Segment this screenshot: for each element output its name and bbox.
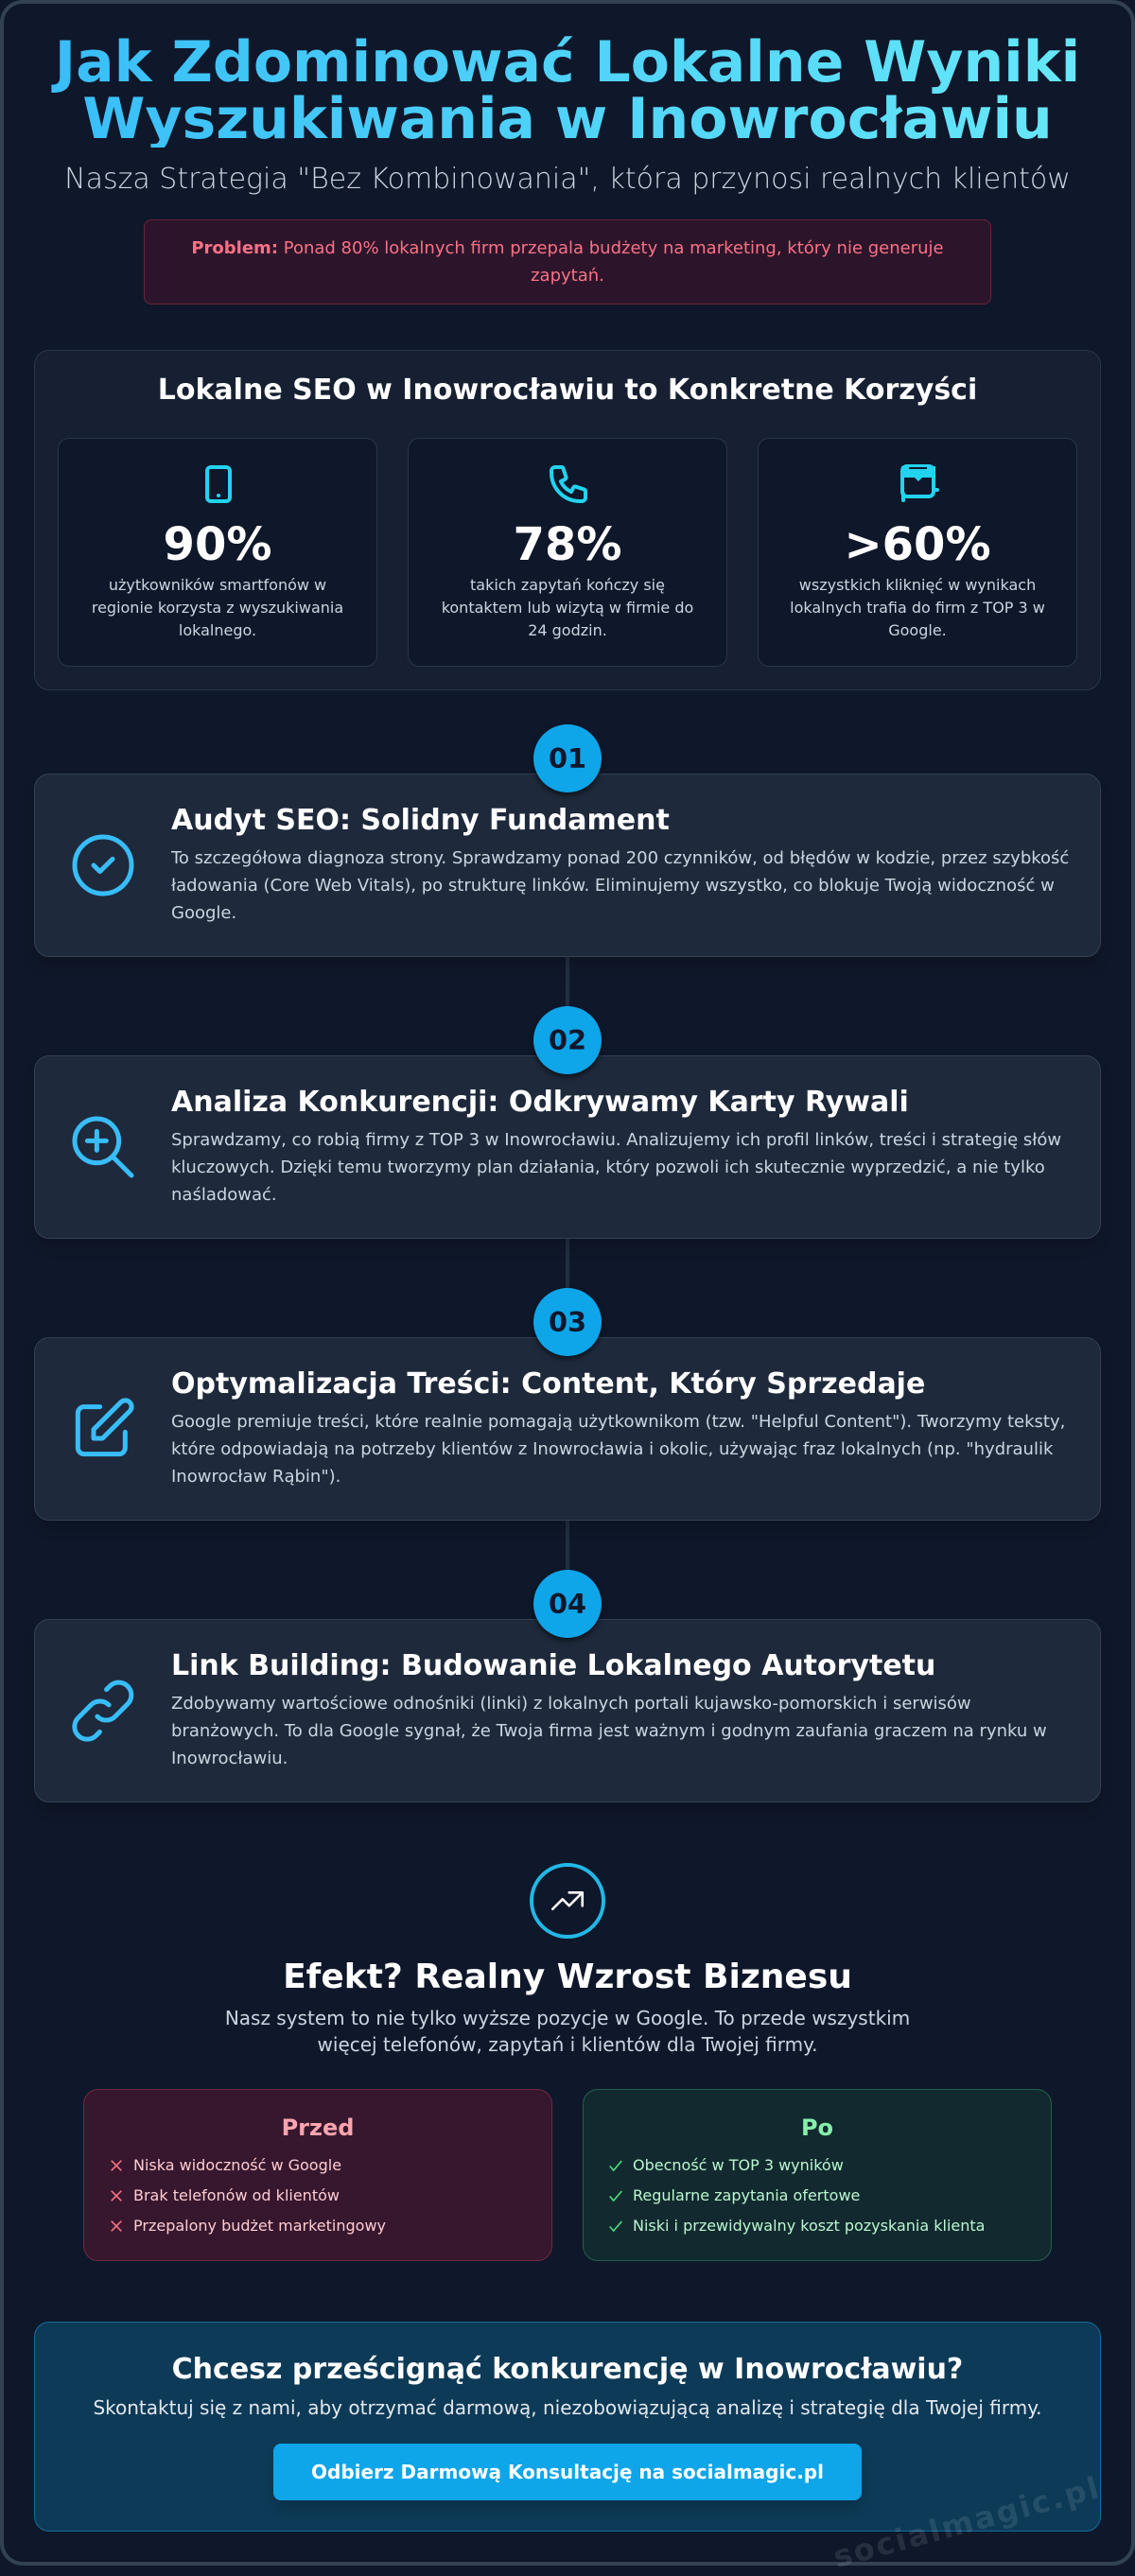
step 2 number: [533, 1006, 602, 1074]
list item: Przepalony budżet marketingowy: [133, 2217, 386, 2235]
step text: kluczowych. Dzięki temu tworzymy plan działania, który pozwoli ich skutecznie wyprzedzić, a nie tylko: [171, 1157, 1045, 1177]
after heading: Po: [801, 2115, 833, 2141]
step 3 card: [34, 1337, 1101, 1521]
step text: Inowrocław Rąbin").: [171, 1467, 340, 1487]
results text: [225, 2007, 910, 2056]
connector line 2: [566, 1239, 569, 1296]
stat description: [442, 576, 693, 639]
panel: call to action: [34, 2322, 1101, 2532]
step text: [171, 1130, 1061, 1205]
stat card: 78%: [408, 438, 727, 667]
cta heading: Chcesz prześcignąć konkurencję w Inowrocławiu?: [172, 2353, 963, 2386]
panel: benefits: [34, 350, 1101, 690]
step 2 card: [34, 1055, 1101, 1239]
connector line 1: [566, 957, 569, 1014]
icon: phone: [550, 465, 587, 503]
benefits heading: Lokalne SEO w Inowrocławiu to Konkretne Korzyści: [158, 374, 977, 407]
step text: [171, 1412, 1065, 1487]
icon: magnifier plus: [72, 1116, 134, 1178]
stat description: [92, 576, 343, 639]
stat description: wszystkich kliknięć w wynikach: [799, 576, 1036, 594]
step text: To szczegółowa diagnoza strony. Sprawdzamy ponad 200 czynników, od błędów w kodzie, przez szybkość: [171, 848, 1069, 868]
icon: click target: [900, 464, 939, 502]
stat description: Google.: [888, 621, 947, 639]
step text: Google.: [171, 903, 236, 923]
panel: after: [583, 2089, 1052, 2261]
step text: Zdobywamy wartościowe odnośniki (linki) z lokalnych portali kujawsko-pomorskich i serwisów: [171, 1694, 971, 1714]
list item: Niska widoczność w Google: [133, 2156, 341, 2174]
step text: naśladować.: [171, 1185, 277, 1205]
step title: Audyt SEO: Solidny Fundament: [171, 804, 670, 837]
title: Wyszukiwania w Inowrocławiu: [82, 86, 1053, 152]
problem callout: zapytań.: [531, 266, 604, 286]
stat description: regionie korzysta z wyszukiwania: [92, 599, 343, 617]
results text: więcej telefonów, zapytań i klientów dla Twojej firmy.: [318, 2033, 817, 2056]
before heading: Przed: [282, 2115, 354, 2141]
results text: Nasz system to nie tylko wyższe pozycje w Google. To przede wszystkim: [225, 2007, 910, 2029]
step text: branżowych. To dla Google sygnał, że Twoja firma jest ważnym i godnym zaufania graczem na rynku w: [171, 1721, 1047, 1741]
stat card: 90%: [58, 438, 377, 667]
icon: growth chart in circle: [530, 1863, 605, 1939]
subtitle: Nasza Strategia "Bez Kombinowania", która przynosi realnych klientów: [64, 163, 1071, 196]
stat description: lokalnych trafia do firm z TOP 3 w: [790, 599, 1045, 617]
panel: before: [83, 2089, 552, 2261]
icon: smartphone: [205, 465, 232, 503]
problem callout: Problem: Ponad 80% lokalnych firm przepala budżety na marketing, który nie generuje: [191, 238, 944, 258]
stat description: takich zapytań kończy się: [470, 576, 665, 594]
icon: check circle: [72, 834, 134, 896]
icon: pencil: [76, 1398, 134, 1456]
step text: [170, 848, 1069, 923]
stat description: [790, 576, 1045, 639]
list item: Niski i przewidywalny koszt pozyskania klienta: [633, 2217, 985, 2235]
step 4 number: 04: [549, 1588, 586, 1620]
step 4 number: [533, 1570, 602, 1638]
step 3 number: [533, 1288, 602, 1356]
icon: link: [72, 1680, 134, 1742]
step text: Inowrocławiu.: [171, 1749, 288, 1768]
results heading: Efekt? Realny Wzrost Biznesu: [283, 1958, 852, 1996]
problem callout: [144, 219, 991, 305]
step 2 number: 02: [549, 1024, 586, 1056]
before list: [111, 2156, 386, 2235]
step 1 number: [533, 724, 602, 792]
cta button: [273, 2444, 862, 2500]
step 3 number: 03: [549, 1306, 586, 1338]
stat description: lokalnego.: [179, 621, 256, 639]
stat value: >60%: [844, 518, 991, 571]
stat description: użytkowników smartfonów w: [109, 576, 326, 594]
step text: ładowania (Core Web Vitals), po strukturę linków. Eliminujemy wszystko, co blokuje Twoją widoczność w: [171, 876, 1055, 896]
after list: [609, 2156, 985, 2235]
title: [38, 34, 1097, 148]
step text: Google premiuje treści, które realnie pomagają użytkownikom (tzw. "Helpful Content"). Tworzymy teksty,: [171, 1412, 1065, 1432]
icon: trending arrow: [550, 1891, 585, 1910]
step title: Link Building: Budowanie Lokalnego Autorytetu: [171, 1649, 935, 1682]
stat card: >60%: [758, 438, 1077, 667]
step 4 card: [34, 1619, 1101, 1802]
cta text: Skontaktuj się z nami, aby otrzymać darmową, niezobowiązującą analizę i strategię dla Twojej firmy.: [93, 2396, 1042, 2419]
list item: Regularne zapytania ofertowe: [633, 2186, 860, 2204]
stat description: kontaktem lub wizytą w firmie do: [442, 599, 693, 617]
cta button: Odbierz Darmową Konsultację na socialmagic.pl: [311, 2461, 824, 2483]
step title: Analiza Konkurencji: Odkrywamy Karty Rywali: [171, 1086, 909, 1119]
stat value: 90%: [164, 518, 271, 571]
stat description: 24 godzin.: [528, 621, 607, 639]
stat value: 78%: [514, 518, 621, 571]
step text: Sprawdzamy, co robią firmy z TOP 3 w Inowrocławiu. Analizujemy ich profil linków, treści i strategię słów: [171, 1130, 1061, 1150]
step text: które odpowiadają na potrzeby klientów z Inowrocławia i okolic, używając fraz lokalnych (np. "hydraulik: [171, 1439, 1053, 1459]
list item: Brak telefonów od klientów: [133, 2186, 340, 2204]
watermark: socialmagic.pl: [829, 2469, 1105, 2575]
list item: Obecność w TOP 3 wyników: [633, 2156, 844, 2174]
step text: [171, 1694, 1047, 1768]
step title: Optymalizacja Treści: Content, Który Sprzedaje: [171, 1367, 925, 1401]
step 1 card: [34, 774, 1101, 957]
step 1 number: 01: [549, 742, 586, 775]
title: Jak Zdominować Lokalne Wyniki: [55, 29, 1080, 96]
connector line 3: [566, 1520, 569, 1576]
